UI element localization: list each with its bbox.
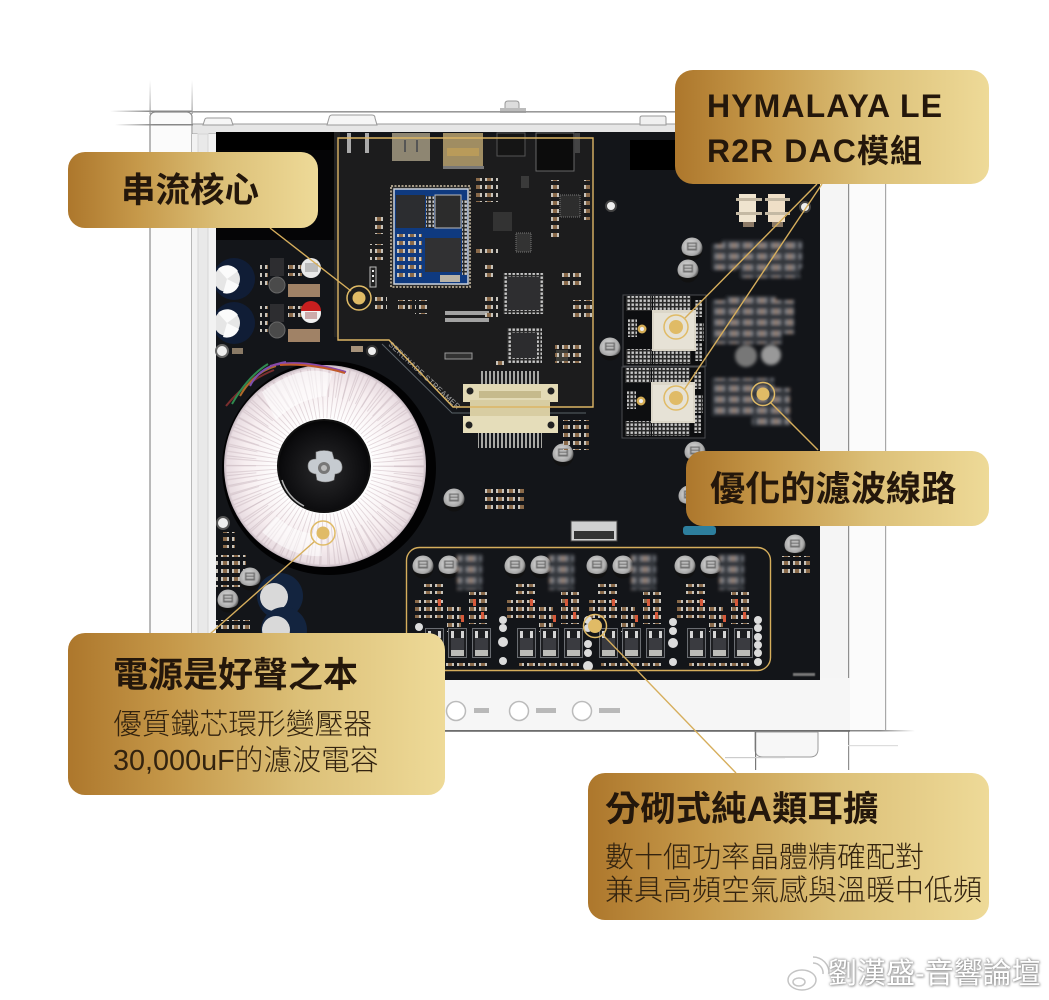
chips bbox=[493, 176, 580, 363]
callout markers bbox=[311, 286, 774, 638]
heading: DAC module: R2R DAC模組 bbox=[707, 133, 923, 169]
gold outlines and callout leaders bbox=[210, 138, 822, 773]
ribbon connector bbox=[571, 521, 617, 541]
centre hole bbox=[278, 420, 370, 512]
marker: amp bbox=[584, 614, 606, 638]
connectors row bbox=[347, 133, 580, 171]
toroidal transformer bbox=[222, 361, 436, 575]
large capacitors bbox=[213, 258, 255, 344]
transformer wires bbox=[226, 362, 346, 406]
icon: weibo logo bbox=[788, 957, 829, 990]
DAC modules bbox=[622, 295, 706, 438]
leader: streamer bbox=[270, 228, 351, 291]
leader: DAC lower bbox=[684, 184, 822, 390]
right side components bbox=[444, 194, 810, 574]
blurred filter circuit bbox=[712, 240, 802, 426]
mounting bolt bbox=[308, 450, 342, 482]
callout: class A amp bbox=[588, 773, 989, 920]
text: class A amp details: 數十個功率晶體精確配對 bbox=[605, 842, 924, 874]
chassis line drawing bbox=[110, 80, 915, 770]
marker: streamer bbox=[347, 286, 371, 310]
callout: filter circuit bbox=[686, 451, 989, 526]
heading: power supply: 電源是好聲之本 bbox=[113, 656, 358, 695]
watermark: 劉漢盛-音響論壇 bbox=[828, 958, 1041, 990]
callout: DAC module bbox=[675, 70, 989, 184]
chassis foot bbox=[755, 732, 818, 757]
marker: DAC lower bbox=[664, 386, 688, 410]
product illustration bbox=[113, 83, 912, 991]
callout: streaming core bbox=[68, 152, 318, 228]
marker: DAC upper bbox=[664, 315, 688, 339]
heading: DAC module: HYMALAYA LE bbox=[707, 88, 943, 124]
leader: DAC upper bbox=[684, 184, 817, 319]
heading: DAC module bbox=[707, 88, 943, 169]
board connector bbox=[463, 371, 558, 448]
text: power supply details: 30,000uF的濾波電容 bbox=[113, 745, 379, 777]
leader: amp bbox=[602, 634, 736, 773]
heading: class A amp: 分砌式純A類耳擴 bbox=[605, 789, 878, 829]
power amp block bbox=[412, 554, 762, 671]
heading: filter circuit: 優化的濾波線路 bbox=[710, 470, 956, 509]
text: class A amp details: 兼具高頻空氣感與溫暖中低頻 bbox=[605, 875, 982, 907]
front panel bbox=[440, 678, 850, 732]
blue resistor bbox=[683, 526, 716, 535]
text: power supply details bbox=[113, 709, 379, 777]
board silkscreen: SERENADE STREAMER bbox=[387, 340, 462, 411]
marker: transformer bbox=[311, 521, 335, 545]
heading: streaming core: 串流核心 bbox=[121, 172, 259, 210]
text: class A amp details bbox=[605, 842, 982, 907]
callout: power supply bbox=[68, 633, 445, 795]
small parts bbox=[370, 178, 592, 368]
leader: filter bbox=[770, 402, 818, 450]
streamer board bbox=[338, 133, 593, 448]
outline: streamer board bbox=[338, 138, 593, 407]
marker: filter bbox=[752, 382, 774, 406]
left power supply parts bbox=[213, 258, 321, 653]
circuit board bbox=[216, 132, 820, 680]
text: power supply details: 優質鐵芯環形變壓器 bbox=[113, 709, 372, 741]
leader: power bbox=[210, 541, 315, 634]
compute module bbox=[391, 186, 470, 287]
outline: amp block bbox=[406, 548, 770, 670]
